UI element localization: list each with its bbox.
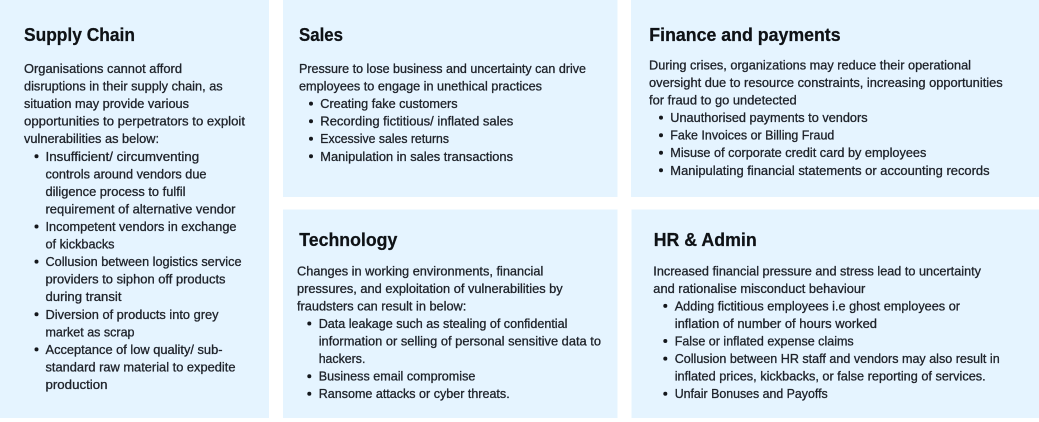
list: supply chain risks — [34, 149, 242, 392]
text block: sales intro: Pressure to lose business and uncertainty can drive — [299, 61, 586, 76]
list: HR risks — [663, 298, 1000, 401]
list: technology risks — [307, 316, 601, 401]
list: supply chain risks: requirement of alternative vendor — [46, 201, 236, 216]
text block: sales intro — [299, 61, 586, 94]
list: technology risks: Ransome attacks or cyber threats. — [319, 386, 510, 401]
list: finance risks: Manipulating financial statements or accounting records — [670, 163, 990, 178]
list: finance risks: Misuse of corporate credit card by employees — [670, 145, 927, 160]
list: supply chain risks: Diversion of products into grey — [46, 307, 219, 322]
list: supply chain risks: diligence process to fulfil — [46, 184, 186, 199]
text block: finance intro: During crises, organizations may reduce their operational — [649, 58, 971, 72]
text block: HR intro: Increased financial pressure and stress lead to uncertainty — [653, 263, 981, 278]
panel: Finance and payments — [631, 0, 1039, 197]
list: sales risks — [309, 96, 514, 164]
list: technology risks: Business email compromise — [319, 369, 475, 384]
list: HR risks: inflation of number of hours worked — [675, 316, 877, 331]
list: HR risks: inflated prices, kickbacks, or false reporting of services. — [675, 369, 986, 384]
list: technology risks: Data leakage such as stealing of confidential — [319, 316, 568, 331]
list: finance risks: Fake Invoices or Billing Fraud — [670, 128, 834, 143]
list: supply chain risks: during transit — [46, 289, 122, 304]
panel: HR & Admin — [632, 210, 1039, 418]
list: technology risks: information or selling of personal sensitive data to — [319, 334, 601, 348]
list: finance risks: Unauthorised payments to vendors — [670, 110, 868, 125]
list: HR risks: Unfair Bonuses and Payoffs — [675, 386, 828, 401]
text block: technology intro: fraudsters can result in below: — [297, 298, 466, 313]
list: sales risks: Creating fake customers — [320, 96, 458, 111]
list: sales risks: Manipulation in sales transactions — [320, 149, 513, 164]
list: HR risks: False or inflated expense claims — [675, 334, 854, 348]
heading: Finance and payments: Finance and payments — [649, 24, 841, 45]
list: supply chain risks: controls around vendors due — [46, 166, 206, 181]
list: sales risks: Excessive sales returns — [320, 131, 449, 146]
list: supply chain risks: production — [46, 377, 108, 392]
text block: supply chain intro: situation may provide various — [24, 96, 189, 111]
panel: Supply Chain — [0, 0, 269, 418]
heading: Sales: Sales — [299, 24, 343, 45]
heading: HR & Admin: HR & Admin — [654, 229, 757, 250]
text block: supply chain intro — [24, 61, 245, 146]
text block: HR intro: and rationalise misconduct behaviour — [653, 281, 866, 296]
text block: sales intro: employees to engage in unethical practices — [299, 79, 542, 94]
text block: technology intro: pressures, and exploitation of vulnerabilities by — [297, 281, 563, 296]
text block: supply chain intro: disruptions in their supply chain, as — [24, 79, 223, 94]
text block: supply chain intro: vulnerabilities as below: — [24, 131, 159, 146]
text block: supply chain intro: opportunities to perpetrators to exploit — [24, 114, 245, 129]
text block: finance intro — [649, 58, 1003, 108]
list: supply chain risks: providers to siphon off products — [46, 272, 226, 287]
list: supply chain risks: Acceptance of low quality/ sub- — [46, 342, 222, 357]
list: HR risks: Adding fictitious employees i.e ghost employees or — [675, 298, 961, 313]
list: supply chain risks: standard raw material to expedite — [46, 359, 236, 374]
heading: Technology: Technology — [299, 229, 398, 250]
list: supply chain risks: of kickbacks — [46, 236, 115, 252]
text block: technology intro — [297, 263, 563, 313]
list: HR risks: Collusion between HR staff and vendors may also result in — [675, 351, 1000, 366]
list: supply chain risks: Incompetent vendors in exchange — [46, 219, 236, 234]
list: supply chain risks: Collusion between logistics service — [46, 254, 242, 269]
text block: HR intro — [653, 263, 981, 296]
panel: Sales — [283, 0, 618, 197]
text block: finance intro: oversight due to resource constraints, increasing opportunities — [649, 75, 1003, 90]
panel: Technology — [283, 210, 618, 418]
list: technology risks: hackers. — [319, 351, 365, 366]
heading: Supply Chain: Supply Chain — [24, 24, 135, 45]
text block: finance intro: for fraud to go undetected — [649, 93, 797, 108]
list: supply chain risks: market as scrap — [46, 324, 134, 339]
text block: technology intro: Changes in working environments, financial — [297, 263, 543, 278]
list: finance risks — [659, 110, 990, 178]
text block: supply chain intro: Organisations cannot afford — [24, 61, 182, 76]
list: sales risks: Recording fictitious/ inflated sales — [320, 114, 514, 129]
list: supply chain risks: Insufficient/ circumventing — [46, 149, 199, 164]
